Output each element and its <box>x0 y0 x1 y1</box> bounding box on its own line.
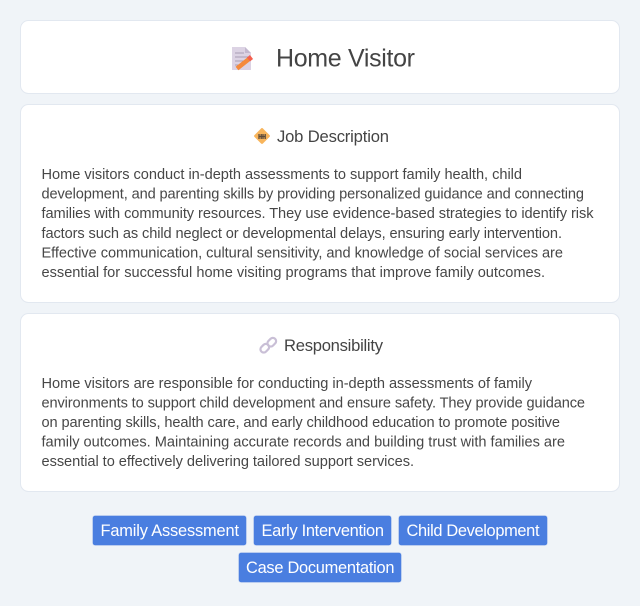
text block: job description: families with community resources. They use evidence-based strategies to identify risk <box>42 206 594 222</box>
text block: responsibility: essential to effectively delivering tailored support services. <box>42 454 414 470</box>
tag: case documentation <box>238 552 402 582</box>
panel: job description <box>20 104 620 302</box>
text block: job description: development, and parenting skills by providing personalized guidance and connecting <box>42 187 584 203</box>
tag: early intervention <box>254 516 392 546</box>
tag: case documentation: Case Documentation <box>246 559 394 577</box>
text block: job description: Effective communication, cultural sensitivity, and knowledge of social services are <box>42 245 563 261</box>
heading: job description: Job Description <box>277 127 389 146</box>
text block: responsibility: on parenting skills, health care, and early childhood education to promote positive <box>42 415 560 431</box>
title: Home Visitor <box>276 45 415 73</box>
text block: job description <box>42 167 594 281</box>
icon: document with pencil <box>232 47 252 70</box>
text block: responsibility: family outcomes. Maintaining accurate records and building trust with families are <box>42 435 565 451</box>
text block: responsibility <box>42 376 585 470</box>
text block: job description: essential for successful home visiting programs that improve family outcomes. <box>42 265 545 281</box>
icon: diamond sign <box>254 128 270 144</box>
tag: child development <box>398 516 548 546</box>
tag: early intervention: Early Intervention <box>262 522 384 540</box>
text block: job description: Home visitors conduct in-depth assessments to support family health, child <box>42 167 522 183</box>
panel: responsibility <box>20 314 620 492</box>
tag: family assessment <box>92 516 246 546</box>
text block: responsibility: environments to support child development and ensure safety. They provide guidance <box>42 396 585 412</box>
panel: title card <box>20 20 620 94</box>
tag: family assessment: Family Assessment <box>100 522 239 540</box>
tag: child development: Child Development <box>406 522 540 540</box>
icon: chain link <box>259 337 277 354</box>
text block: job description: factors such as child neglect or developmental delays, ensuring early intervention. <box>42 226 562 242</box>
heading: responsibility: Responsibility <box>284 336 384 355</box>
text block: responsibility: Home visitors are responsible for conducting in-depth assessments of family <box>42 376 533 392</box>
